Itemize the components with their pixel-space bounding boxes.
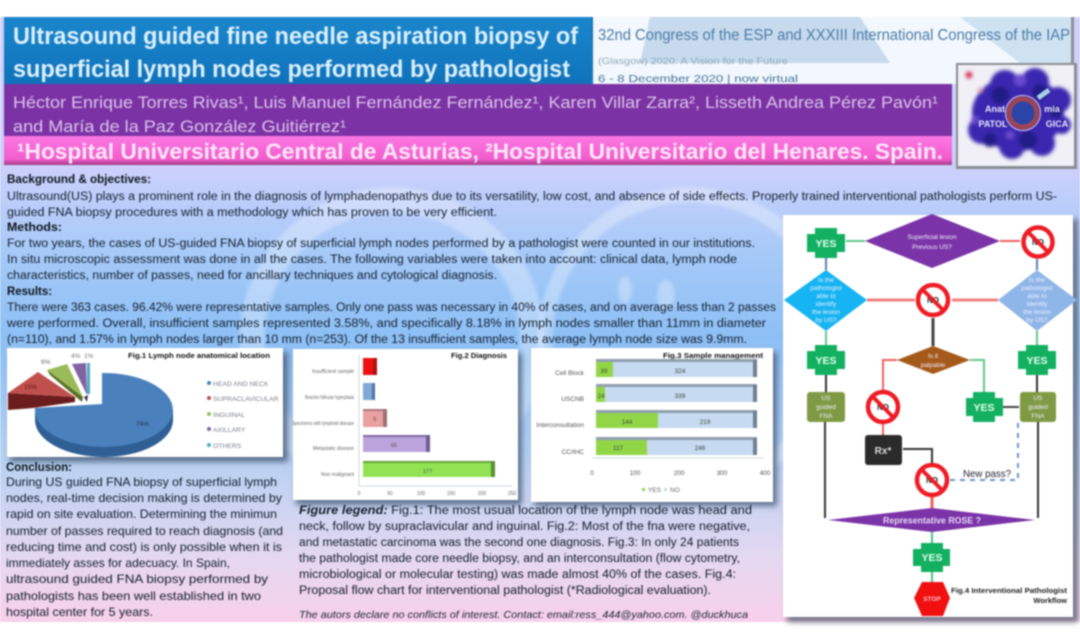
logo: Anatomia Patologica — [956, 63, 1077, 169]
fig 3 category labels: CC/IHC — [562, 449, 584, 456]
affiliations text: ¹Hospital Universitario Central de Asturias, ²Hospital Universitario del Henares. Spain. — [17, 139, 943, 164]
text block: disclosure and contact: The autors declare no conflicts of interest. Contact: email:ress_444@yahoo.com. @duckhuca — [299, 609, 748, 621]
fig 2 axis ticks: 0 — [358, 491, 361, 497]
fig 3 bars: 246 — [695, 445, 706, 452]
text block: figure legend: and metastatic carcinoma was the second one diagnosis. Fig.3: In only 24 patients — [299, 537, 739, 549]
yes node bottom: YES — [921, 552, 943, 564]
authors text: Héctor Enrique Torres Rivas¹, Luis Manuel Fernández Fernández¹, Karen Villar Zarra², Lisseth Andrea Pérez Pavón¹ — [13, 93, 938, 112]
black box: Rx — [865, 435, 902, 465]
text block: conclusion: number of passes required to reach diagnosis (and — [6, 524, 283, 538]
pie chart: 4% — [71, 353, 81, 360]
decision: pathologist able, left: pathologist — [810, 285, 842, 292]
fig 3 category labels — [536, 370, 585, 456]
fig 3 legend: YES — [648, 487, 662, 494]
fig 1 legend — [207, 381, 279, 450]
text block: methods: For two years, the cases of US-guided FNA biopsy of superficial lymph nodes performed by a pathologist were counted in our institutions. — [7, 238, 755, 250]
decision: superficial lesion: Superficial lesion — [907, 234, 957, 241]
pie chart: 6% — [41, 359, 51, 366]
pie chart: 1% — [84, 353, 94, 360]
olive box left: US guided FNA: guided — [816, 404, 836, 411]
no node left: NO — [877, 403, 889, 412]
yes node bottom — [913, 543, 950, 572]
fig 3 bars: 324 — [675, 368, 686, 375]
fig 2 category labels: Specimens with lymphoid disease — [292, 421, 354, 427]
logo: Anatomia Patologica: mia — [1044, 104, 1061, 114]
text block: conclusion: hospital center for 5 years. — [6, 605, 153, 619]
congress date: 6 - 8 December 2020 | now virtual — [598, 73, 798, 85]
panel: title — [4, 17, 591, 84]
panel: fig 1 pie chart — [7, 348, 288, 462]
fig 2 category labels: Metastatic disease — [313, 446, 354, 452]
fig 2 category labels: Reactive follicular hyperplasia — [305, 395, 355, 401]
fig 2 axis ticks: 50 — [387, 491, 393, 497]
text block: methods: In situ microscopic assessment was done in all the cases. The following variables were taken into account: clinical data, lymph node — [7, 254, 737, 266]
text block: figure legend: microbiological or molecular testing) was made almost 40% of the cases. Fig.4: — [299, 569, 736, 581]
decision: pathologist able, right: Is the — [1029, 277, 1045, 284]
olive box right: US guided FNA: guided — [1028, 404, 1048, 411]
yes node right: YES — [1026, 355, 1048, 367]
olive box right: US guided FNA — [1020, 392, 1056, 422]
text block: background and objectives: Ultrasound(US) plays a prominent role in the diagnosis of lymphadenopathys due to its versatility, low cost, and absence of side effects. Properly trained interventional pathologists perform US- — [7, 191, 1057, 203]
yes node center right — [966, 392, 1003, 422]
text block: methods: characteristics, number of passes, need for ancillary techniques and cytological diagnosis. — [7, 270, 497, 282]
panel: congress banner — [591, 17, 1074, 85]
authors text: and María de la Paz González Guitiérrez¹ — [13, 117, 346, 136]
decision: pathologist able, left — [784, 270, 867, 331]
decision: ROSE palpable: Is it — [928, 353, 938, 360]
text block: figure legend: the pathologist made core needle biopsy, and an interconsultation (flow cytometry, — [299, 553, 740, 565]
decision: ROSE palpable: palpable — [921, 362, 946, 369]
text block: figure legend: Figure legend: Fig.1: The most usual location of the lymph node was head and — [299, 505, 752, 517]
text block: conclusion: nodes, real-time decision making is determined by — [6, 491, 282, 505]
fig 2 axes — [359, 355, 512, 486]
authors text — [13, 93, 938, 136]
panel: fig 4 flowchart — [783, 214, 1078, 622]
fig 3 category labels: USCNB — [561, 396, 584, 403]
fig 2 axis ticks: 100 — [417, 491, 425, 497]
fig 2 bars — [363, 358, 495, 477]
text block: results — [6, 286, 776, 346]
flowchart connectors — [825, 241, 1038, 582]
text block: conclusion — [6, 462, 283, 619]
text block: results: Results: — [7, 286, 52, 298]
no node center — [918, 285, 948, 315]
text block: methods — [7, 222, 755, 282]
decision: pathologist able, left: the lesion — [812, 309, 840, 316]
olive box right: US guided FNA: US — [1033, 395, 1043, 402]
text block: results: There were 363 cases. 96.42% were representative samples. Only one pass was necessary in 40% of cases, and on average less than 2 passes — [7, 302, 776, 314]
fig 1 legend: OTHERS — [213, 443, 242, 450]
decision: pathologist able, left: Is the — [818, 277, 834, 284]
fig 3 legend: NO — [670, 487, 680, 494]
fig 2 category labels — [292, 369, 355, 478]
fig 3 title: Fig.3 Sample management — [663, 353, 764, 360]
fig 3 category labels: Interconsultation — [536, 422, 584, 429]
label: new pass: New pass? — [963, 468, 1011, 480]
fig 1 legend: INGUINAL — [213, 412, 245, 419]
no node center: NO — [927, 296, 939, 305]
pie chart: 74% — [136, 421, 149, 428]
yes node right — [1018, 345, 1056, 375]
fig 2 axis ticks — [358, 491, 516, 497]
olive box left: US guided FNA: FNA — [820, 413, 833, 420]
decision: pathologist able, right: pathologist — [1021, 285, 1053, 292]
stop node — [914, 582, 950, 616]
fig 1 legend: AXILLARY — [213, 427, 246, 434]
fig 3 legend — [642, 487, 680, 494]
fig 2 category labels: Non malignant — [321, 472, 354, 478]
yes node top: YES — [815, 238, 837, 250]
text block: background and objectives — [7, 174, 1057, 219]
no node bottom: NO — [926, 476, 938, 485]
olive box left: US guided FNA: US — [821, 395, 831, 402]
fig 4 caption: Fig.4 Interventional Pathologist — [951, 586, 1068, 595]
panel: affiliations — [4, 136, 952, 165]
decision: pathologist able, left: able to — [816, 293, 836, 300]
decision: pathologist able, right: able to — [1027, 293, 1047, 300]
fig 3 axis: 0 — [590, 470, 594, 477]
decision: pathologist able, right — [998, 270, 1077, 331]
decision: superficial lesion: Previous US? — [912, 244, 952, 251]
yes node top — [807, 228, 845, 258]
fig 2 bars: 65 — [391, 443, 397, 449]
no node top — [1024, 228, 1052, 256]
fig 3 axis — [590, 458, 771, 477]
fig 3 bars: 117 — [613, 445, 624, 452]
pie chart: 15% — [24, 384, 37, 391]
fig 3 category labels: Cell Block — [555, 370, 585, 377]
fig 3 axis: 300 — [717, 470, 728, 477]
decision: superficial lesion — [865, 214, 1000, 268]
fig 2 axis ticks: 200 — [478, 491, 486, 497]
olive box left: US guided FNA — [807, 392, 845, 422]
fig 2 bars: 9 — [373, 417, 376, 423]
background watermark — [252, 195, 835, 485]
fig 1 title: Fig.1 Lymph node anatomical location — [128, 353, 270, 360]
panel: fig 2 bar chart — [292, 349, 522, 505]
fig 3 axis: 100 — [630, 470, 641, 477]
text block: background and objectives: Background & objectives: — [7, 174, 151, 186]
fig 2 axis ticks: 150 — [447, 491, 455, 497]
black box: Rx: Rx* — [875, 446, 891, 457]
fig 3 bars: 339 — [675, 393, 686, 400]
panel: fig 3 stacked bar chart — [531, 348, 777, 506]
yes node left: YES — [815, 355, 837, 367]
congress title: 32nd Congress of the ESP and XXXIII International Congress of the IAP — [598, 27, 1070, 44]
no node top: NO — [1032, 238, 1044, 247]
fig 3 bars: 219 — [700, 419, 711, 426]
stop node: STOP — [923, 596, 941, 603]
text block: conclusion: pathologists has been well established in two — [6, 589, 261, 603]
logo: Anatomia Patologica: PATOL — [978, 119, 1008, 129]
text block: conclusion: During US guided FNA biopsy of superficial lymph — [6, 475, 277, 489]
fig 2 category labels: Insufficient sample — [312, 369, 354, 375]
text block: conclusion: ultrasound guided FNA biopsy performed by — [6, 572, 268, 586]
text block: figure legend: Proposal flow chart for interventional pathologist (*Radiological evaluation). — [299, 585, 711, 597]
fig 2 title: Fig.2 Diagnosis — [451, 353, 507, 360]
text block: conclusion: rapid on site evaluation. Determining the minimun — [6, 507, 277, 521]
fig 4 caption — [951, 586, 1068, 605]
text block: figure legend — [299, 505, 752, 597]
fig 2 axis ticks: 250 — [508, 491, 516, 497]
title text: Ultrasound guided fine needle aspiration biopsy of — [13, 23, 579, 50]
decision: pathologist able, left: by US? — [815, 317, 837, 324]
text block: conclusion: Conclusion: — [6, 462, 72, 474]
text block: background and objectives: guided FNA biopsy procedures with a methodology which has proven to be very efficient. — [7, 207, 497, 219]
text block: conclusion: immediately asses for adecuacy. In Spain, — [6, 556, 230, 570]
fig 3 axis: 400 — [760, 470, 771, 477]
yes node center right: YES — [973, 402, 995, 414]
pie chart — [8, 353, 173, 457]
decision: pathologist able, right: identify — [1027, 301, 1048, 308]
fig 3 bars: 24 — [597, 393, 605, 400]
decision: pathologist able, right: the lesion — [1023, 309, 1051, 316]
fig 3 bars: 39 — [600, 368, 608, 375]
text block: results: were performed. Overall, insufficient samples represented 3.58%, and specifically 8.18% in lymph nodes smaller than 11mm in diameter — [6, 318, 766, 330]
title text: superficial lymph nodes performed by pathologist — [13, 56, 570, 83]
olive box right: US guided FNA: FNA — [1032, 413, 1045, 420]
fig 3 bars: 144 — [622, 419, 633, 426]
yes node left — [807, 345, 845, 375]
decision: pathologist able, left: identify — [816, 301, 837, 308]
fig 1 legend: HEAD AND NECK — [213, 381, 269, 388]
logo: Anatomia Patologica: GICA — [1046, 119, 1069, 129]
decision: pathologist able, right: by US? — [1026, 317, 1048, 324]
text block: figure legend: neck, follow by supraclavicular and inguinal. Fig.2: Most of the fna were negative, — [299, 521, 750, 533]
text block: conclusion: reducing time and cost) is only possible when it is — [6, 540, 282, 554]
fig 4 caption: Workflow — [1033, 596, 1067, 605]
title text — [13, 23, 579, 83]
fig 3 bars — [596, 359, 757, 455]
no node bottom — [917, 465, 947, 495]
text block: results: (n=110), and 1.57% in lymph nodes larger than 10 mm (n=253). Of the 13 insufficient samples, the average lymph node size was 9.9mm. — [7, 334, 747, 346]
decision: representative ROSE — [828, 508, 1035, 532]
text block: methods: Methods: — [7, 222, 62, 234]
decision: representative ROSE: Representative ROSE ? — [883, 516, 981, 526]
panel: authors — [4, 84, 952, 136]
fig 3 axis: 200 — [674, 470, 685, 477]
fig 2 bars: 177 — [423, 469, 432, 475]
fig 1 legend: SUPRACLAVICULAR — [213, 396, 279, 403]
decision: ROSE palpable — [897, 346, 970, 374]
congress subtitle: (Glasgow) 2020: A Vision for the Future — [598, 56, 788, 67]
logo: Anatomia Patologica: Anat — [985, 104, 1005, 114]
no node left — [868, 392, 898, 422]
